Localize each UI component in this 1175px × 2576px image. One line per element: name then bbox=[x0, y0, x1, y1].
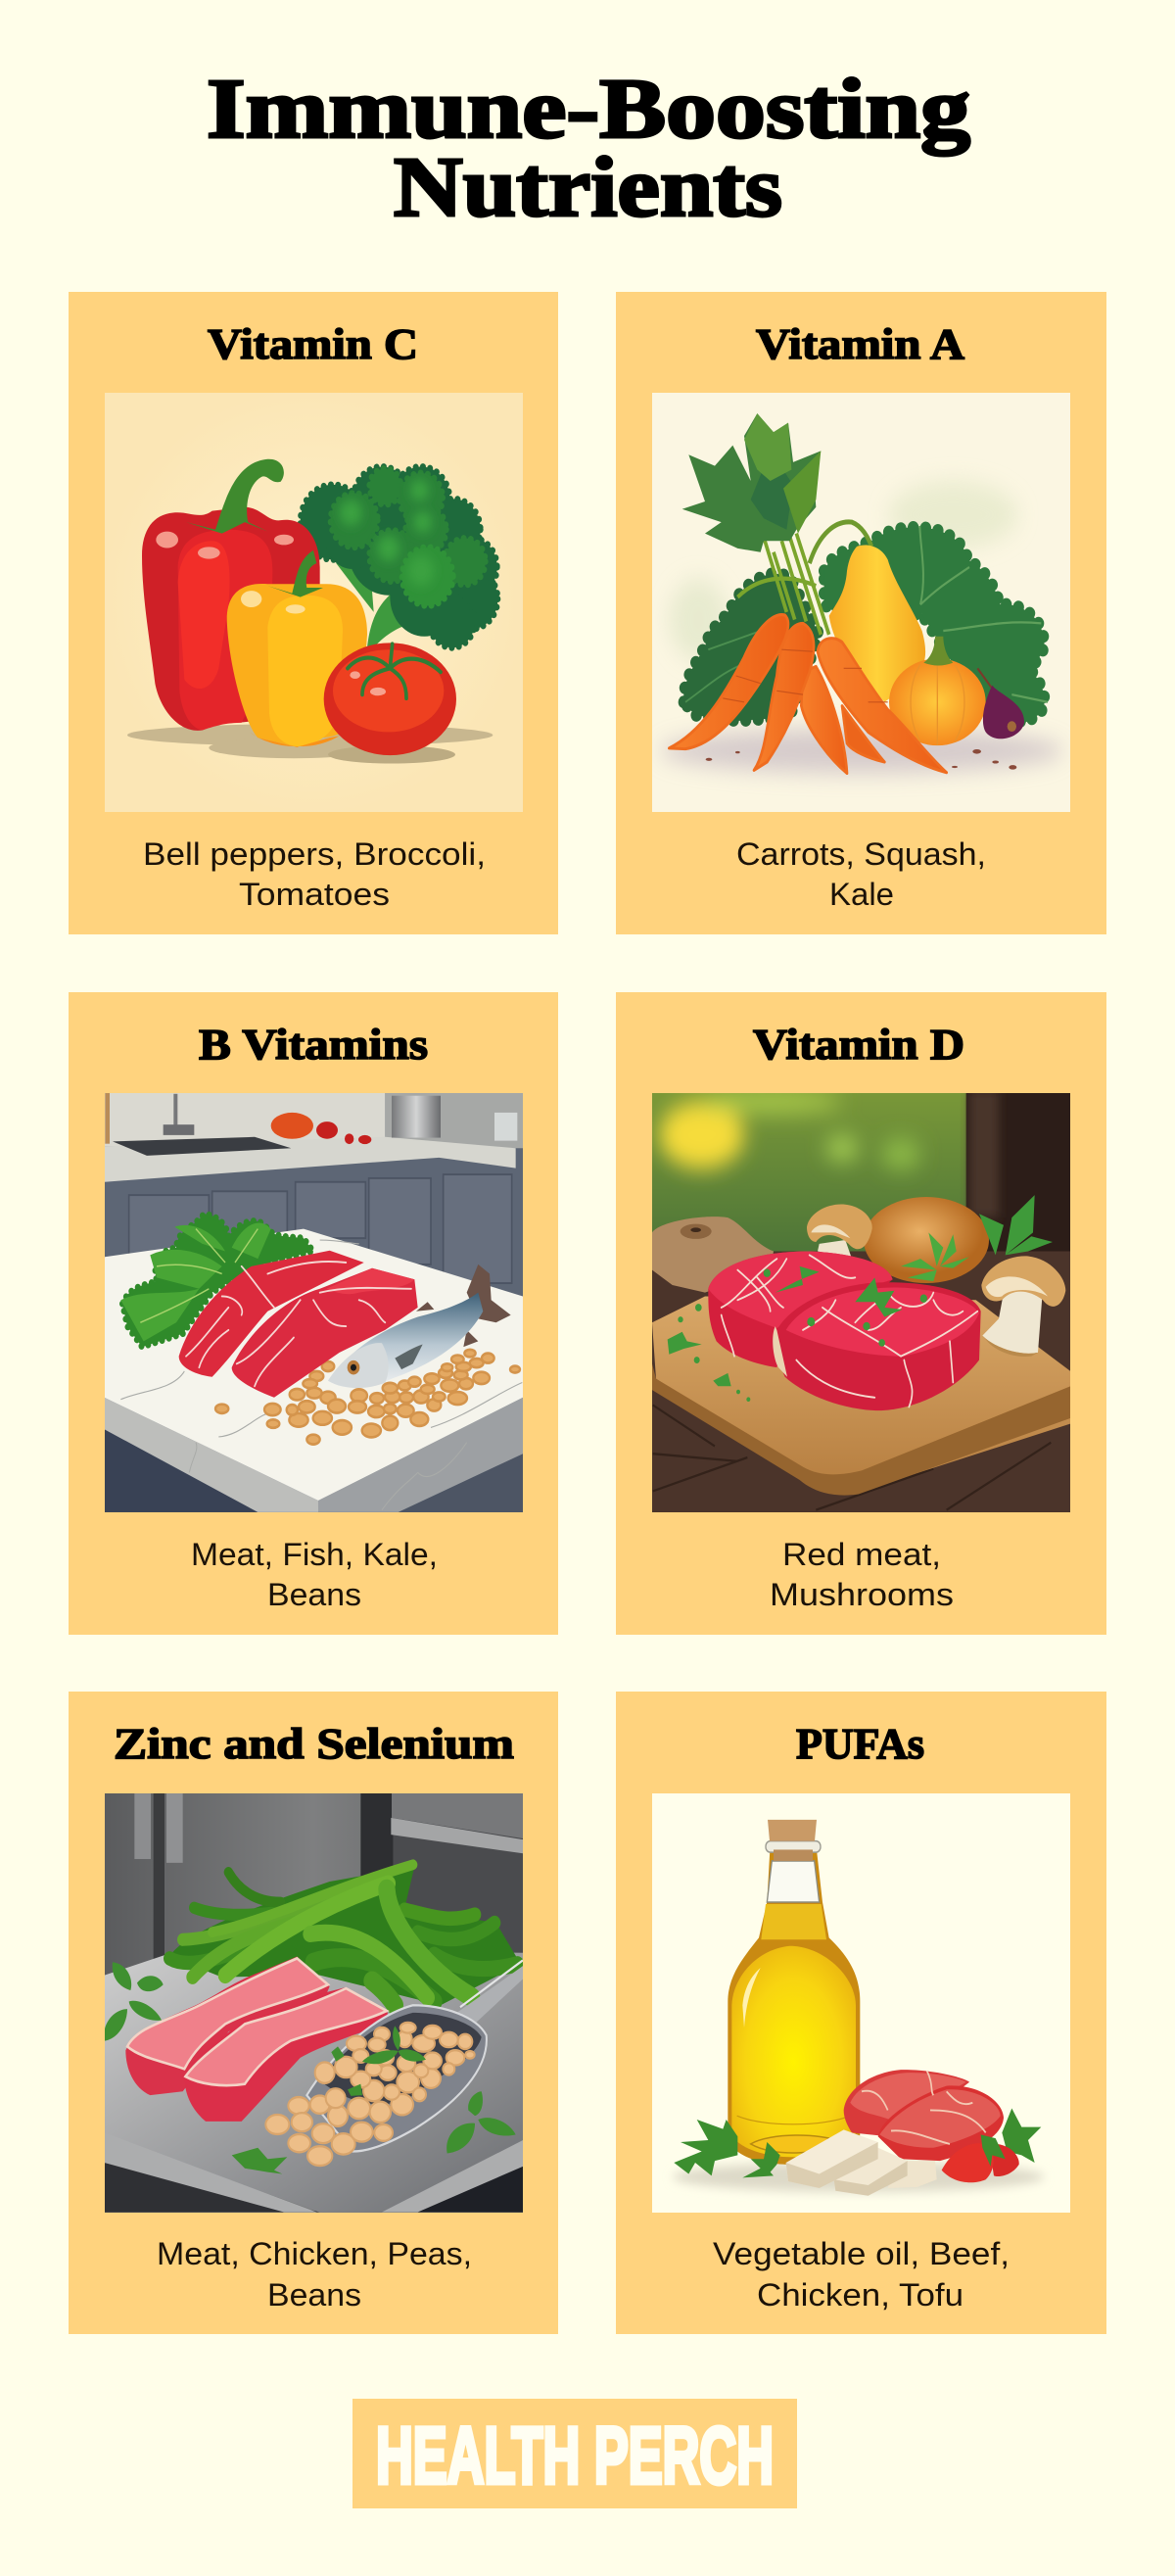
ingredient text: Carrots, Squash, bbox=[736, 836, 986, 872]
kitchen wall bbox=[105, 1093, 385, 1146]
icon: mushroom, front bbox=[981, 1256, 1065, 1357]
icon: carrot greens bbox=[682, 413, 829, 635]
icon: yellow bell pepper bbox=[227, 550, 367, 747]
wooden table bbox=[649, 1252, 1074, 1517]
icon: kale bbox=[120, 1214, 313, 1347]
kitchen counter with sink bbox=[105, 1093, 516, 1182]
illustration: carrots, squash, kale bbox=[649, 387, 1074, 815]
ingredient text bbox=[713, 2236, 1010, 2313]
icon: fish bbox=[328, 1264, 511, 1388]
title: Immune-Boosting bbox=[207, 61, 970, 156]
cabinets bbox=[129, 1174, 512, 1283]
icon: red bell pepper bbox=[142, 459, 320, 731]
ingredient text bbox=[770, 1537, 954, 1612]
ground shadow bbox=[127, 724, 493, 764]
pot bbox=[392, 1096, 441, 1138]
icon: squash bbox=[810, 522, 925, 702]
icon: carrots bbox=[669, 615, 947, 773]
icon: broccoli bbox=[301, 466, 497, 647]
blurred forest background bbox=[652, 1093, 1070, 1252]
cutting board bbox=[652, 1216, 1070, 1496]
heading: PUFAs: PUFAs bbox=[796, 1720, 924, 1768]
title: Nutrients bbox=[394, 139, 782, 234]
steel fridge background bbox=[101, 1788, 526, 2216]
panel: B Vitamins bbox=[69, 992, 558, 1635]
panel: Vitamin C bbox=[69, 292, 558, 934]
illustration: meat, peas, beans bbox=[101, 1788, 526, 2216]
title bbox=[207, 61, 970, 234]
icon: tofu bbox=[786, 2129, 937, 2196]
ingredient text: Vegetable oil, Beef, bbox=[713, 2236, 1010, 2271]
ingredient text: Beans bbox=[267, 1577, 361, 1612]
herb sprigs on meat and board bbox=[668, 1266, 927, 1402]
soil specks bbox=[706, 749, 1016, 770]
ingredient text bbox=[143, 836, 486, 912]
icon: green beans bbox=[169, 1865, 521, 2005]
tomatoes on counter bbox=[271, 1113, 371, 1144]
panel: PUFAs bbox=[616, 1692, 1106, 2334]
ingredient text: Tomatoes bbox=[239, 877, 390, 912]
icon: meat slices bbox=[179, 1251, 418, 1398]
icon: beet bbox=[977, 668, 1024, 739]
icon: kale leaves bbox=[683, 526, 1048, 723]
ingredient text: Kale bbox=[829, 877, 894, 912]
ground shadow bbox=[673, 2162, 1045, 2192]
icon: parsley bbox=[674, 2109, 1041, 2177]
icon: leaves bbox=[104, 1962, 516, 2173]
ingredient text: Red meat, bbox=[782, 1537, 941, 1572]
icon: tomato bbox=[324, 643, 456, 755]
ingredient text bbox=[191, 1537, 438, 1612]
ingredient text: Meat, Fish, Kale, bbox=[191, 1537, 438, 1572]
heading: Vitamin C: Vitamin C bbox=[208, 320, 418, 368]
logo: Health Perch: HEALTH PERCH bbox=[376, 2411, 774, 2501]
icon: beef bbox=[844, 2070, 1004, 2161]
icon: mushroom, back bbox=[807, 1204, 872, 1259]
icon: herb leaves bbox=[901, 1195, 1053, 1281]
illustration: meat, fish, kale, beans bbox=[101, 1090, 526, 1517]
ingredient text bbox=[736, 836, 986, 912]
icon: oil bottle bbox=[728, 1820, 860, 2165]
panel: Vitamin A bbox=[616, 292, 1106, 934]
icon: onion bbox=[864, 1197, 989, 1283]
panel: Zinc and Selenium bbox=[69, 1692, 558, 2334]
ingredient text: Chicken, Tofu bbox=[757, 2277, 964, 2313]
icon: beans bbox=[215, 1350, 520, 1445]
heading: Vitamin A: Vitamin A bbox=[756, 320, 964, 368]
icon: steaks bbox=[708, 1252, 981, 1410]
ingredient text: Beans bbox=[267, 2277, 361, 2313]
icon: steaks bbox=[125, 1957, 388, 2122]
icon: strawberries bbox=[942, 2134, 1019, 2182]
icon: chickpeas bbox=[265, 2023, 475, 2166]
panel: Vitamin D bbox=[616, 992, 1106, 1635]
marble island bbox=[105, 1229, 523, 1512]
illustration: peppers, broccoli, tomato bbox=[101, 387, 526, 815]
ingredient text: Bell peppers, Broccoli, bbox=[143, 836, 486, 872]
icon: pumpkin bbox=[889, 637, 986, 745]
ingredient text bbox=[157, 2236, 472, 2313]
icon: scoop of beans bbox=[306, 1960, 523, 2152]
heading: Vitamin D: Vitamin D bbox=[753, 1021, 964, 1069]
illustration: oil bottle, beef, tofu bbox=[649, 1788, 1074, 2216]
heading: B Vitamins: B Vitamins bbox=[199, 1021, 428, 1069]
ingredient text: Mushrooms bbox=[770, 1577, 954, 1612]
illustration: red meat and mushrooms bbox=[649, 1090, 1074, 1517]
ingredient text: Meat, Chicken, Peas, bbox=[157, 2236, 472, 2271]
steel counter bbox=[105, 1949, 523, 2213]
heading: Zinc and Selenium: Zinc and Selenium bbox=[114, 1720, 514, 1768]
soft backdrop bbox=[659, 481, 1064, 773]
logo: Health Perch bbox=[352, 2399, 797, 2508]
